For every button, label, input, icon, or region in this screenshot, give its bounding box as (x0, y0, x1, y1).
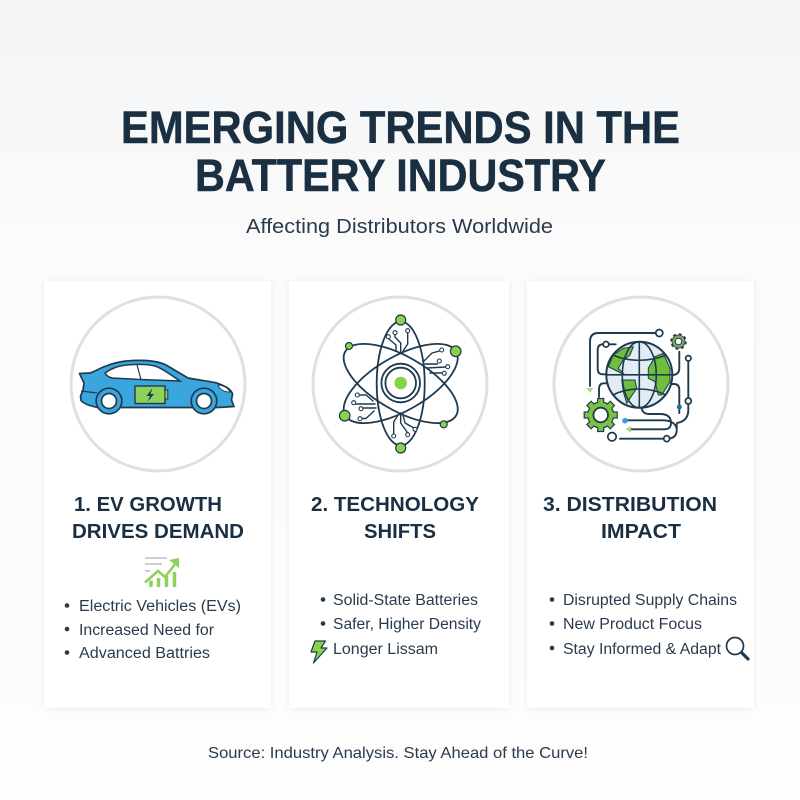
title (121, 102, 680, 201)
circuit traces (356, 333, 446, 434)
globe (606, 342, 672, 408)
icon: battery (135, 386, 168, 404)
icon: magnifying glass (726, 638, 748, 659)
icon: growth chart (145, 558, 179, 587)
heading: technology shifts: 2. TECHNOLOGY (311, 493, 479, 516)
panel: EV growth (44, 281, 271, 708)
panel: distribution impact (527, 281, 754, 708)
heading: EV growth: 1. EV GROWTH (74, 493, 222, 516)
list: EV growth points: Electric Vehicles (EVs) (79, 598, 241, 615)
list: EV growth points (65, 598, 241, 662)
list: technology points: Longer Lissam (333, 641, 438, 658)
icon: globe with supply network (554, 297, 728, 471)
title: EMERGING TRENDS IN THE (121, 102, 680, 153)
heading: technology shifts (311, 493, 479, 543)
list: technology points: Solid-State Batteries (333, 592, 478, 609)
list: EV growth points: Increased Need for (79, 622, 214, 639)
icon: lightning bolt (311, 641, 327, 663)
icon: wheels (96, 388, 217, 414)
orbit nodes (339, 315, 461, 453)
network traces (590, 333, 688, 439)
heading: distribution impact: 3. DISTRIBUTION (543, 493, 717, 516)
list: EV growth points: Advanced Battries (79, 645, 210, 662)
heading: distribution impact (543, 493, 717, 543)
list: technology points: Safer, Higher Density (333, 616, 481, 633)
heading: distribution impact: IMPACT (601, 520, 681, 543)
icon: small gear (672, 334, 686, 348)
icon: electric car in circle (71, 297, 245, 471)
source note: Source: Industry Analysis. Stay Ahead of the Curve! (208, 745, 588, 762)
heading: EV growth (72, 493, 244, 543)
subtitle: Affecting Distributors Worldwide (246, 216, 553, 238)
list: distribution points (550, 592, 737, 658)
list: distribution points: Stay Informed & Adapt (563, 641, 722, 658)
title: BATTERY INDUSTRY (195, 150, 606, 201)
list: distribution points: New Product Focus (563, 616, 702, 633)
heading: technology shifts: SHIFTS (364, 520, 436, 543)
list: technology points (321, 592, 481, 658)
panel: technology shifts (289, 281, 509, 708)
icon: large gear (584, 398, 617, 432)
list: distribution points: Disrupted Supply Chains (563, 592, 737, 609)
heading: EV growth: DRIVES DEMAND (72, 520, 244, 543)
icon: atom with circuits (313, 297, 487, 471)
